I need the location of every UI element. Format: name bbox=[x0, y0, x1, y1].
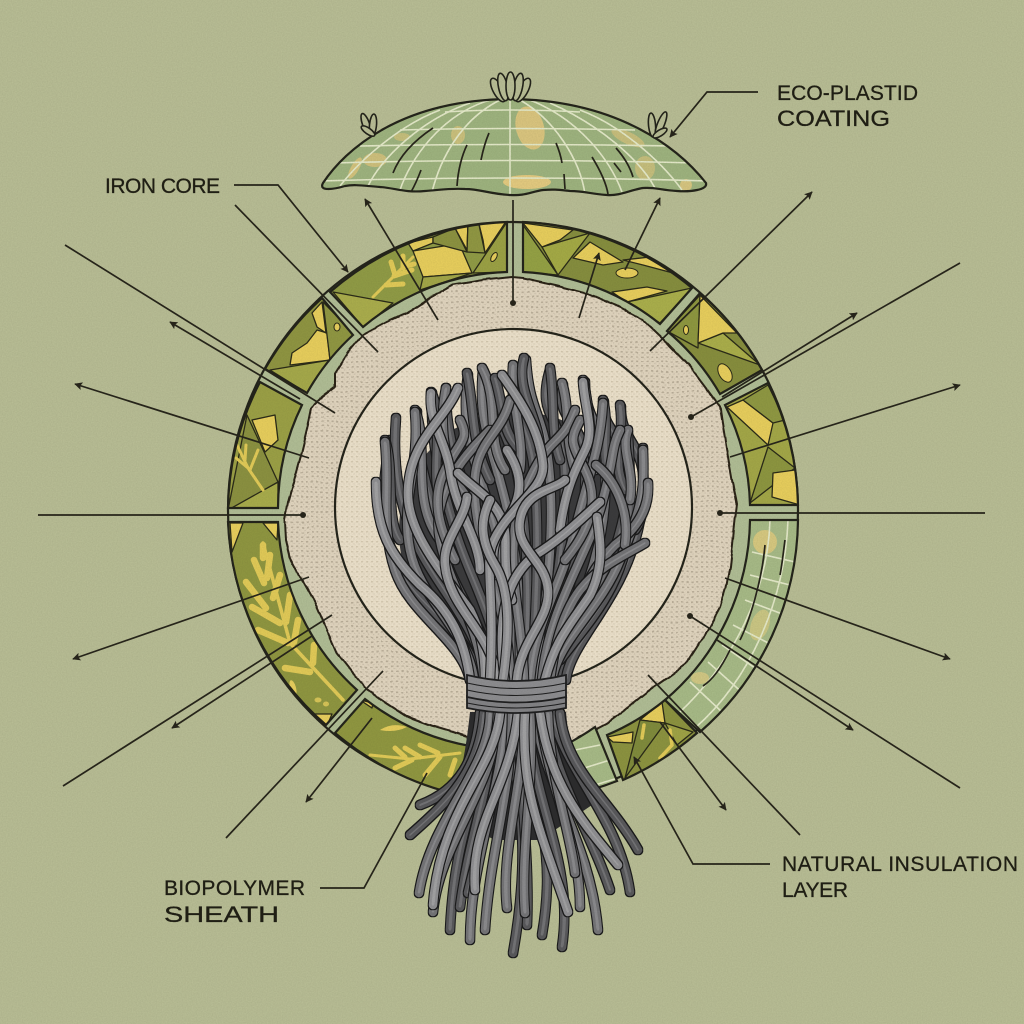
segment: upper right mosaic bbox=[666, 293, 764, 396]
fibre root backing bbox=[445, 712, 592, 840]
label: iron core: IRON CORE bbox=[105, 175, 220, 198]
inner core circle bbox=[335, 329, 692, 686]
label: biopolymer sheath: SHEATH bbox=[164, 902, 279, 927]
fibre crown backing bbox=[399, 412, 621, 680]
segment: bottom left fern mosaic bbox=[334, 698, 466, 790]
dome fill and grid bbox=[323, 100, 705, 194]
iron fibre bundle bbox=[376, 358, 648, 953]
segment: lower left fern mosaic bbox=[225, 520, 365, 730]
segment: right mosaic bbox=[724, 382, 800, 506]
eco-plastid coating dome bbox=[315, 72, 715, 200]
label: biopolymer sheath bbox=[164, 773, 427, 927]
label: natural insulation layer: NATURAL INSULATION bbox=[782, 853, 1018, 876]
icon: left sprout bbox=[359, 112, 377, 138]
label: eco-plastid coating bbox=[670, 82, 918, 137]
icon: top sprout bbox=[487, 72, 534, 104]
segment: top right mosaic bbox=[520, 220, 700, 330]
label: biopolymer sheath: BIOPOLYMER bbox=[164, 877, 305, 900]
label: natural insulation layer: LAYER bbox=[782, 879, 848, 902]
segment: bottom right mosaic bbox=[606, 698, 698, 782]
label: eco-plastid coating: COATING bbox=[777, 106, 890, 131]
icon: right sprout bbox=[647, 111, 669, 140]
segment: top left mosaic bbox=[328, 220, 508, 328]
label: iron core bbox=[105, 175, 348, 272]
label: eco-plastid coating: ECO-PLASTID bbox=[777, 82, 918, 105]
binding tie bbox=[467, 675, 566, 713]
crown strands bbox=[376, 358, 648, 680]
label: natural insulation layer bbox=[634, 757, 1018, 902]
canvas insulation layer bbox=[285, 277, 737, 760]
segment: left mosaic bbox=[226, 380, 304, 510]
ring segments bbox=[225, 215, 805, 800]
radial pointer lines and arrows bbox=[38, 192, 985, 838]
segment: lower right pale grid bbox=[660, 518, 805, 738]
root strands bbox=[410, 713, 638, 953]
segment: bottom pale grid bbox=[572, 725, 618, 788]
ring backing disc bbox=[228, 222, 798, 798]
segment: upper left mosaic bbox=[266, 297, 354, 394]
